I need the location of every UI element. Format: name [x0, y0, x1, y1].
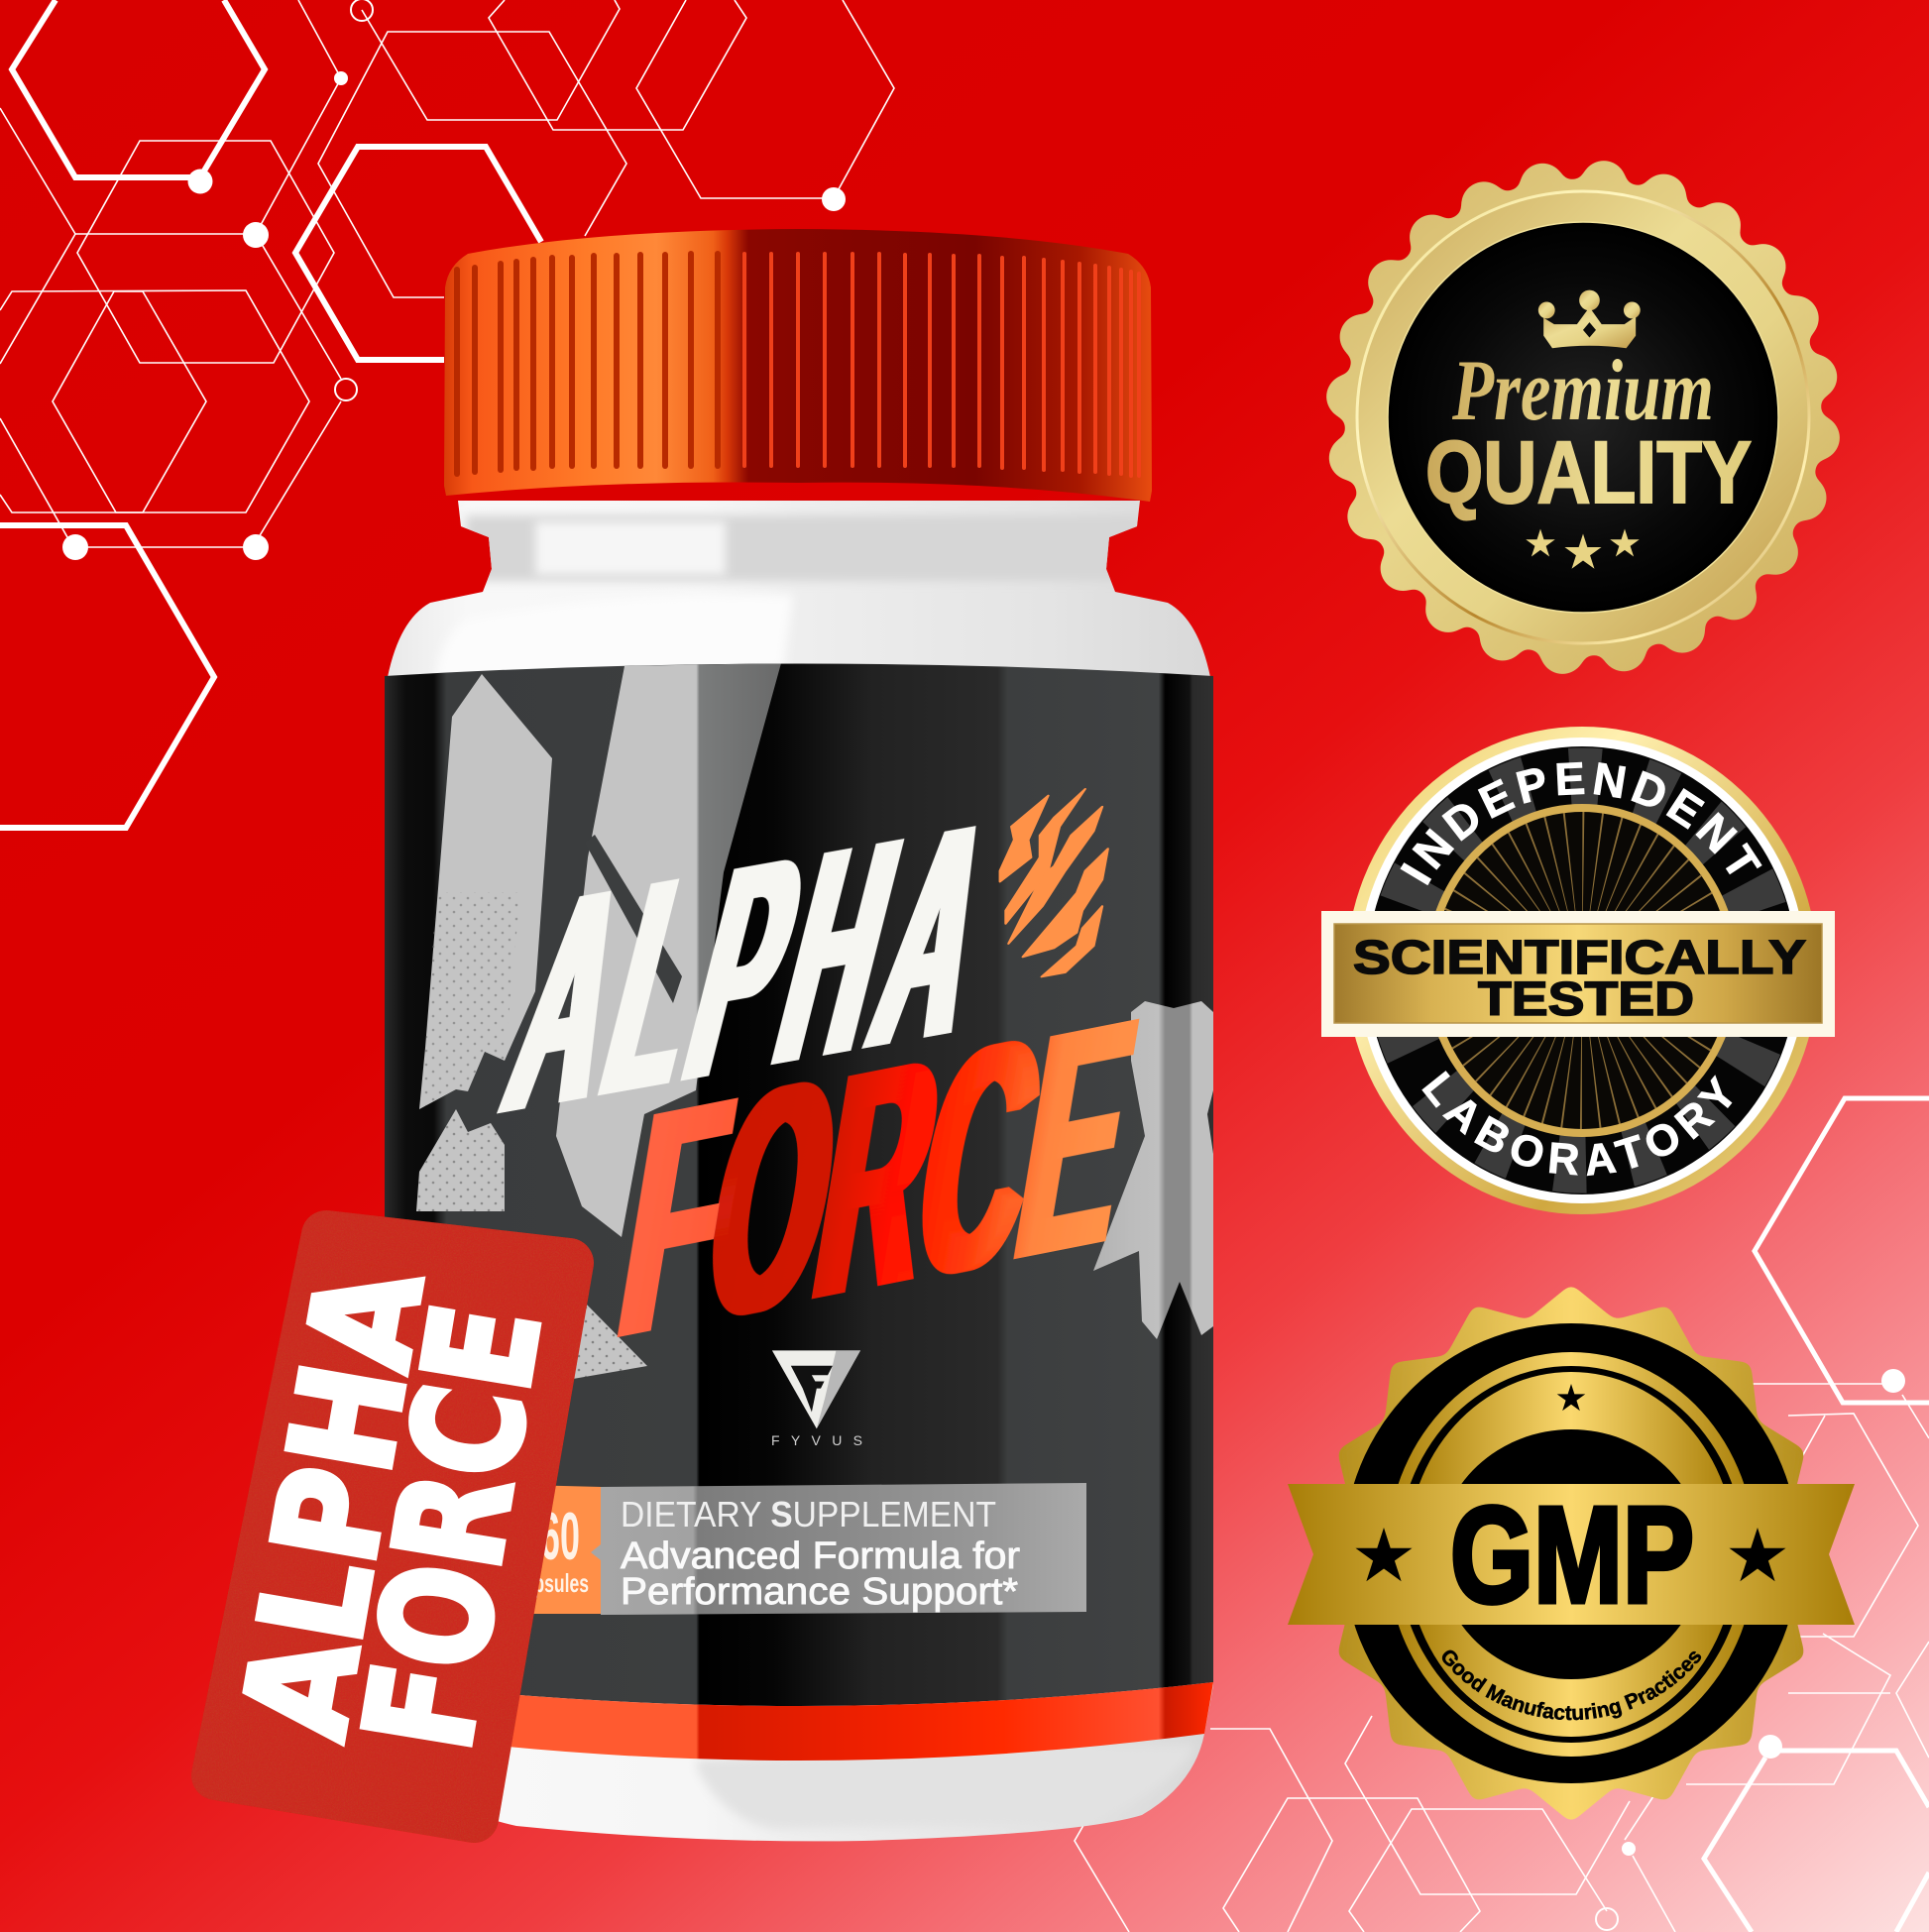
badge: premium quality [1325, 160, 1841, 675]
claw mark icon [1000, 789, 1108, 976]
badge: scientifically tested [1321, 727, 1835, 1214]
black ring [1367, 746, 1797, 1194]
label bottom stripe [385, 1682, 1213, 1761]
base shading [696, 1759, 1092, 1828]
ribbon [1288, 1484, 1855, 1625]
arc text: LABORATORY: LABORATORY [1421, 1071, 1733, 1176]
node rings [335, 0, 373, 400]
capsule count number: 60 [540, 1499, 580, 1574]
neck gloss [535, 521, 726, 575]
arc text: INDEPENDENT: INDEPENDENT [1400, 761, 1762, 886]
supplement heading: DIETARY SUPPLEMENT [621, 1494, 996, 1534]
white ring [1358, 738, 1806, 1203]
FORCE wordmark: FORCE [603, 950, 1152, 1408]
capsule count unit: Capsules [511, 1568, 589, 1598]
scalloped edge [1325, 160, 1841, 675]
ALPHA wordmark: ALPHA [483, 755, 1019, 1180]
thin black ring [1398, 1366, 1745, 1743]
label art: small triangle [573, 1300, 647, 1379]
gold ring [1387, 1352, 1756, 1757]
radial ring segments [1398, 779, 1766, 1162]
hexagon network: top left [0, 0, 894, 828]
node ring [1596, 1908, 1618, 1930]
sunburst rays [1507, 890, 1657, 1051]
screw cap [444, 229, 1152, 502]
node dots [1622, 1369, 1905, 1856]
glass shading [436, 515, 1194, 1829]
thin hexagons [1075, 1384, 1929, 1932]
gold disc [1407, 1372, 1736, 1737]
thick hexagons [1704, 1098, 1929, 1932]
black ring [1343, 1323, 1799, 1783]
cap shell [444, 229, 1152, 502]
neck band [466, 515, 1140, 581]
hexagon network: bottom right [1075, 1098, 1929, 1932]
GMP lettering: GMP [1450, 1479, 1694, 1632]
card text: FORCE: FORCE [333, 1294, 576, 1762]
thick hexagons [0, 0, 541, 828]
banner frame [1321, 911, 1835, 1037]
bottle body [385, 501, 1213, 1841]
arc text: Good Manufacturing Practices [1441, 1649, 1701, 1721]
inner gold ring [1429, 808, 1735, 1133]
dotted texture on blade [419, 892, 520, 1109]
supplement bottle [385, 229, 1213, 1841]
label art: lower triangle [416, 1109, 505, 1211]
thin hexagons [0, 0, 894, 547]
outer gold ring [1346, 727, 1818, 1214]
central black circle [1438, 1429, 1704, 1679]
banner gold [1334, 924, 1822, 1023]
red product card [211, 1235, 576, 1818]
dotted texture on small triangle [577, 1307, 642, 1377]
gold ring [1357, 191, 1809, 643]
ribbon star left [1355, 1528, 1413, 1581]
label art: diagonal bar [556, 663, 781, 1237]
ribbon star right [1729, 1528, 1786, 1581]
formula line 1: Advanced Formula for [621, 1535, 1020, 1577]
node dots [62, 71, 846, 560]
card text: ALPHA: ALPHA [211, 1256, 455, 1750]
cap ribs: lit side [457, 254, 718, 474]
crown icon [1538, 290, 1641, 348]
shoulder gloss [445, 597, 789, 670]
banner text line 1: SCIENTIFICALLY [1353, 932, 1806, 984]
top star [1557, 1384, 1585, 1411]
black center [1388, 222, 1778, 613]
scalloped edge [1317, 1285, 1825, 1822]
brand logo [772, 1350, 860, 1428]
card shape [216, 1235, 569, 1818]
label art: beast silhouette [1093, 1001, 1213, 1339]
label background [385, 644, 1213, 1735]
banner text line 2: TESTED [1478, 973, 1694, 1026]
label art: left blade [419, 674, 552, 1109]
three stars [1526, 529, 1640, 569]
brand name: FYVUS [771, 1432, 862, 1448]
script word: Premium: Premium [1451, 343, 1714, 439]
description panel [591, 1483, 1086, 1615]
cap ribs: shaded side [744, 254, 1139, 476]
product label [385, 644, 1213, 1735]
badge: GMP [1288, 1287, 1855, 1820]
heading: QUALITY: QUALITY [1425, 422, 1752, 521]
capsule count tab [511, 1485, 602, 1614]
dark slash [585, 835, 682, 1003]
formula line 2: Performance Support* [621, 1571, 1018, 1613]
dotted texture on triangle [418, 1118, 504, 1211]
